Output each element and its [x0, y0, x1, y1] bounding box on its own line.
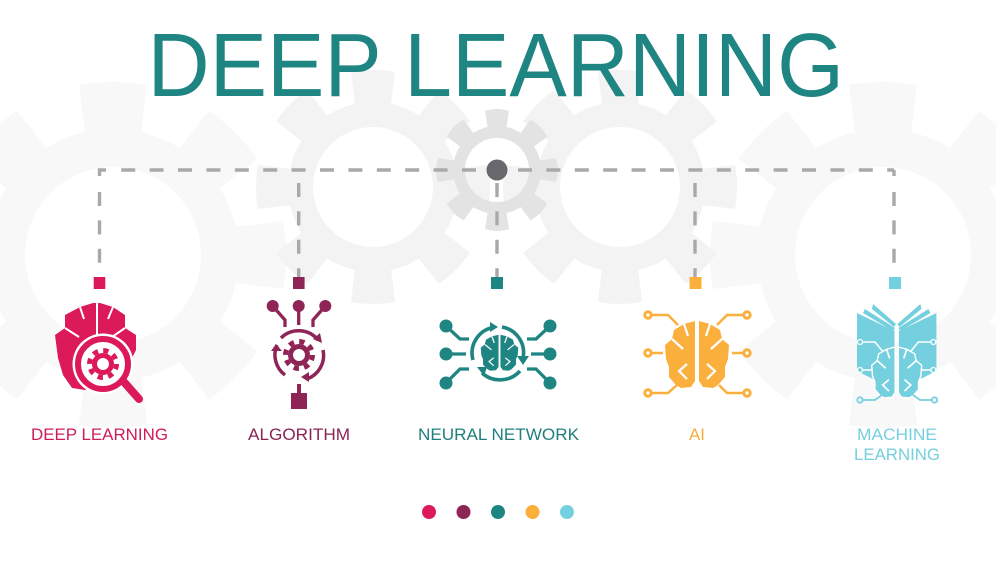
connector node [94, 277, 105, 289]
item: ai [645, 277, 750, 444]
icon: brain with circuits [645, 312, 750, 396]
icon: brain with magnifier [55, 303, 139, 399]
label: ALGORITHM [248, 426, 350, 444]
label: DEEP LEARNING [31, 426, 168, 444]
hub dot [486, 160, 508, 180]
icon: brain with network [440, 320, 556, 390]
connector node [491, 277, 503, 289]
title: DEEP LEARNING [148, 16, 844, 116]
item: machine learning [854, 277, 940, 464]
central gear [436, 109, 558, 231]
background gears [0, 70, 996, 428]
dashed connector lines [100, 170, 894, 277]
item: neural network [418, 277, 579, 444]
connector node [293, 277, 305, 289]
connector node [690, 277, 702, 289]
icon: book with brain [857, 304, 937, 403]
item: deep learning [31, 277, 168, 444]
item: algorithm [248, 277, 350, 444]
icon: gear with branches [267, 300, 331, 409]
label: MACHINE [857, 426, 937, 444]
pagination dots [422, 505, 574, 519]
connector node [889, 277, 901, 289]
label: AI [689, 426, 705, 444]
label: LEARNING [854, 446, 940, 464]
label: NEURAL NETWORK [418, 426, 579, 444]
